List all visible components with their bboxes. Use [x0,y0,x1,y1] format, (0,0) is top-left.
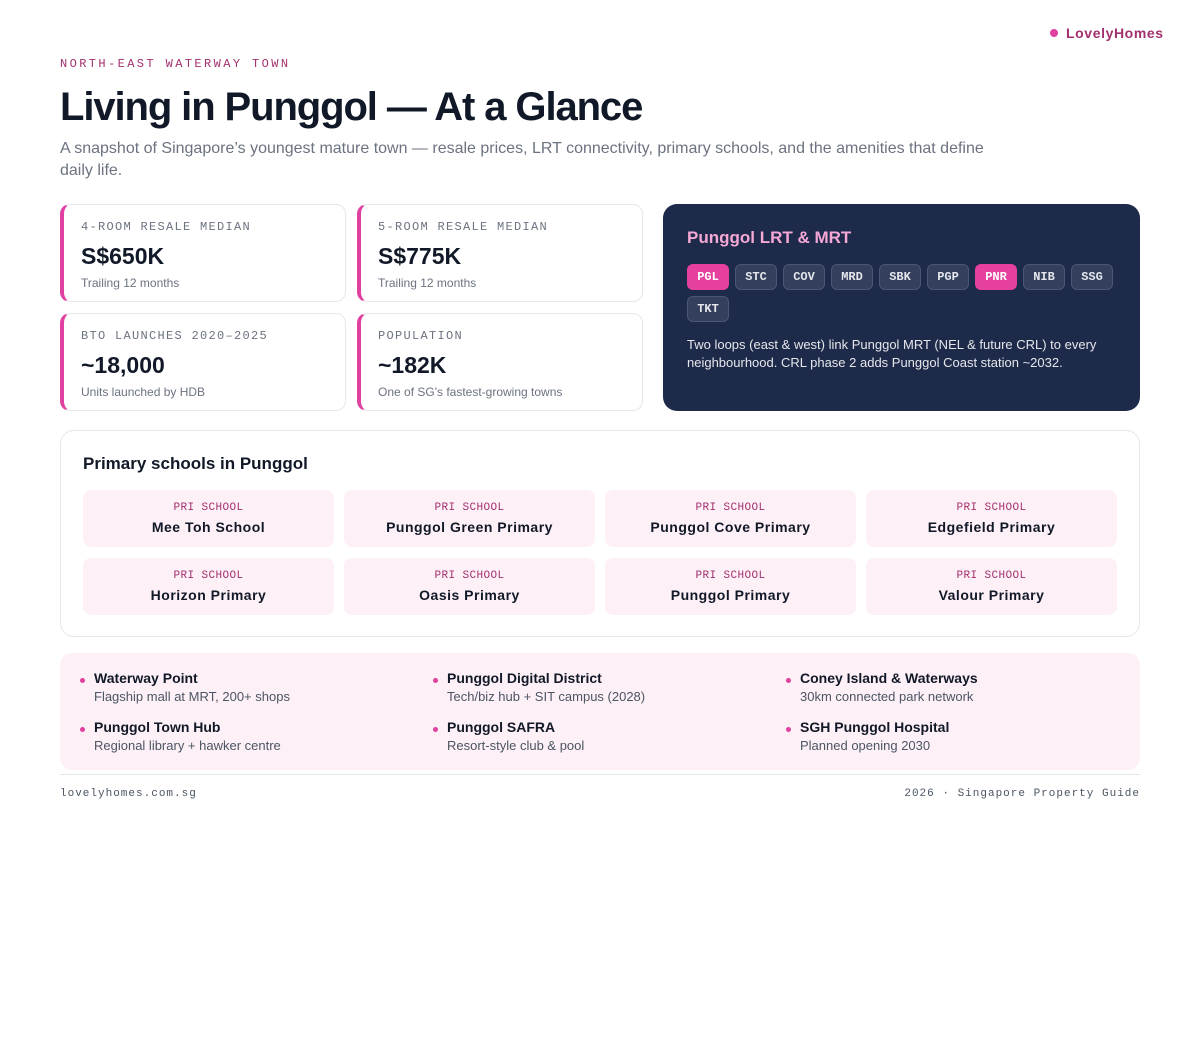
panel: schools: PRI SCHOOL [173,570,244,582]
panel: schools [60,430,1140,637]
panel: schools: Punggol Primary [671,587,790,603]
panel: schools: Punggol Cove Primary [650,519,811,535]
panel: amenities: Tech/biz hub + SIT campus (2028) [447,689,645,704]
station chips: NIB [1033,270,1055,284]
panel: schools: PRI SCHOOL [956,570,1026,582]
stat card: 5-room [357,204,643,302]
stat card: 5-room: 5-ROOM RESALE MEDIAN [378,220,548,234]
stat card: 5-room: Trailing 12 months [378,276,476,290]
station chips: SSG [1081,270,1103,284]
panel: amenities [60,653,1140,770]
panel: schools: Mee Toh School [152,519,265,535]
stat card: BTO: ~18,000 [81,352,165,378]
stat card: 4-room: 4-ROOM RESALE MEDIAN [81,220,251,234]
panel: schools: Edgefield Primary [928,519,1055,535]
station chips: COV [793,270,815,284]
panel: schools: Valour Primary [939,587,1044,603]
LRT heading: Punggol LRT & MRT [687,228,851,247]
stat card: 4-room: S$650K [81,243,164,269]
panel: schools: PRI SCHOOL [173,502,244,514]
eyebrow: NORTH-EAST WATERWAY TOWN [60,57,290,71]
LRT description: Two loops (east & west) link Punggol MRT (NEL & future CRL) to every neighbourhood. CRL phase 2 adds Punggol Coast station ~2032. [687,337,1096,370]
station chips: PGL [697,270,719,284]
panel: amenities: Planned opening 2030 [800,738,930,753]
stat card: 4-room [60,204,346,302]
stat card: 4-room: Trailing 12 months [81,276,179,290]
title: Living in Punggol — At a Glance [60,85,642,129]
footer: lovelyhomes.com.sg [60,788,197,800]
stat card: population: One of SG's fastest-growing towns [378,385,562,399]
stat card: population: POPULATION [378,329,463,343]
panel: schools: Horizon Primary [151,587,266,603]
station chips: TKT [697,302,719,316]
station chips: MRD [841,270,863,284]
station chips: PGP [937,270,959,284]
schools heading: Primary schools in Punggol [83,454,308,473]
subtitle: A snapshot of Singapore’s youngest mature town — resale prices, LRT connectivity, primary schools, and the amenities that define daily life. [60,140,984,179]
footer: 2026 · Singapore Property Guide [904,788,1140,800]
panel: amenities: SGH Punggol Hospital [800,719,949,735]
panel: amenities: Flagship mall at MRT, 200+ shops [94,689,290,704]
panel: schools: Punggol Green Primary [386,519,553,535]
panel: schools: PRI SCHOOL [695,570,766,582]
stat card: 5-room: S$775K [378,243,461,269]
station chips: STC [745,270,767,284]
station chips: PNR [985,270,1007,284]
panel: amenities: Resort-style club & pool [447,738,584,753]
panel: schools: Oasis Primary [419,587,520,603]
footer [60,788,1140,800]
stat card: BTO: Units launched by HDB [81,385,205,399]
logo: LovelyHomes [1066,25,1164,41]
station chips [687,264,1113,322]
panel: amenities: Punggol Digital District [447,670,602,686]
panel: amenities: Waterway Point [94,670,198,686]
stat card: population [357,313,643,411]
panel: schools: PRI SCHOOL [695,502,766,514]
panel: schools: PRI SCHOOL [434,570,504,582]
panel: amenities: Punggol Town Hub [94,719,220,735]
stat card: BTO [60,313,346,411]
panel: amenities: Coney Island & Waterways [800,670,978,686]
panel: schools: PRI SCHOOL [434,502,504,514]
panel: schools: PRI SCHOOL [956,502,1026,514]
panel: LRT [663,204,1140,411]
panel: amenities: 30km connected park network [800,689,973,704]
panel: amenities: Punggol SAFRA [447,719,555,735]
panel: amenities: Regional library + hawker centre [94,738,281,753]
stat card: BTO: BTO LAUNCHES 2020–2025 [81,329,268,343]
stat card: population: ~182K [378,352,446,378]
station chips: SBK [889,270,911,284]
